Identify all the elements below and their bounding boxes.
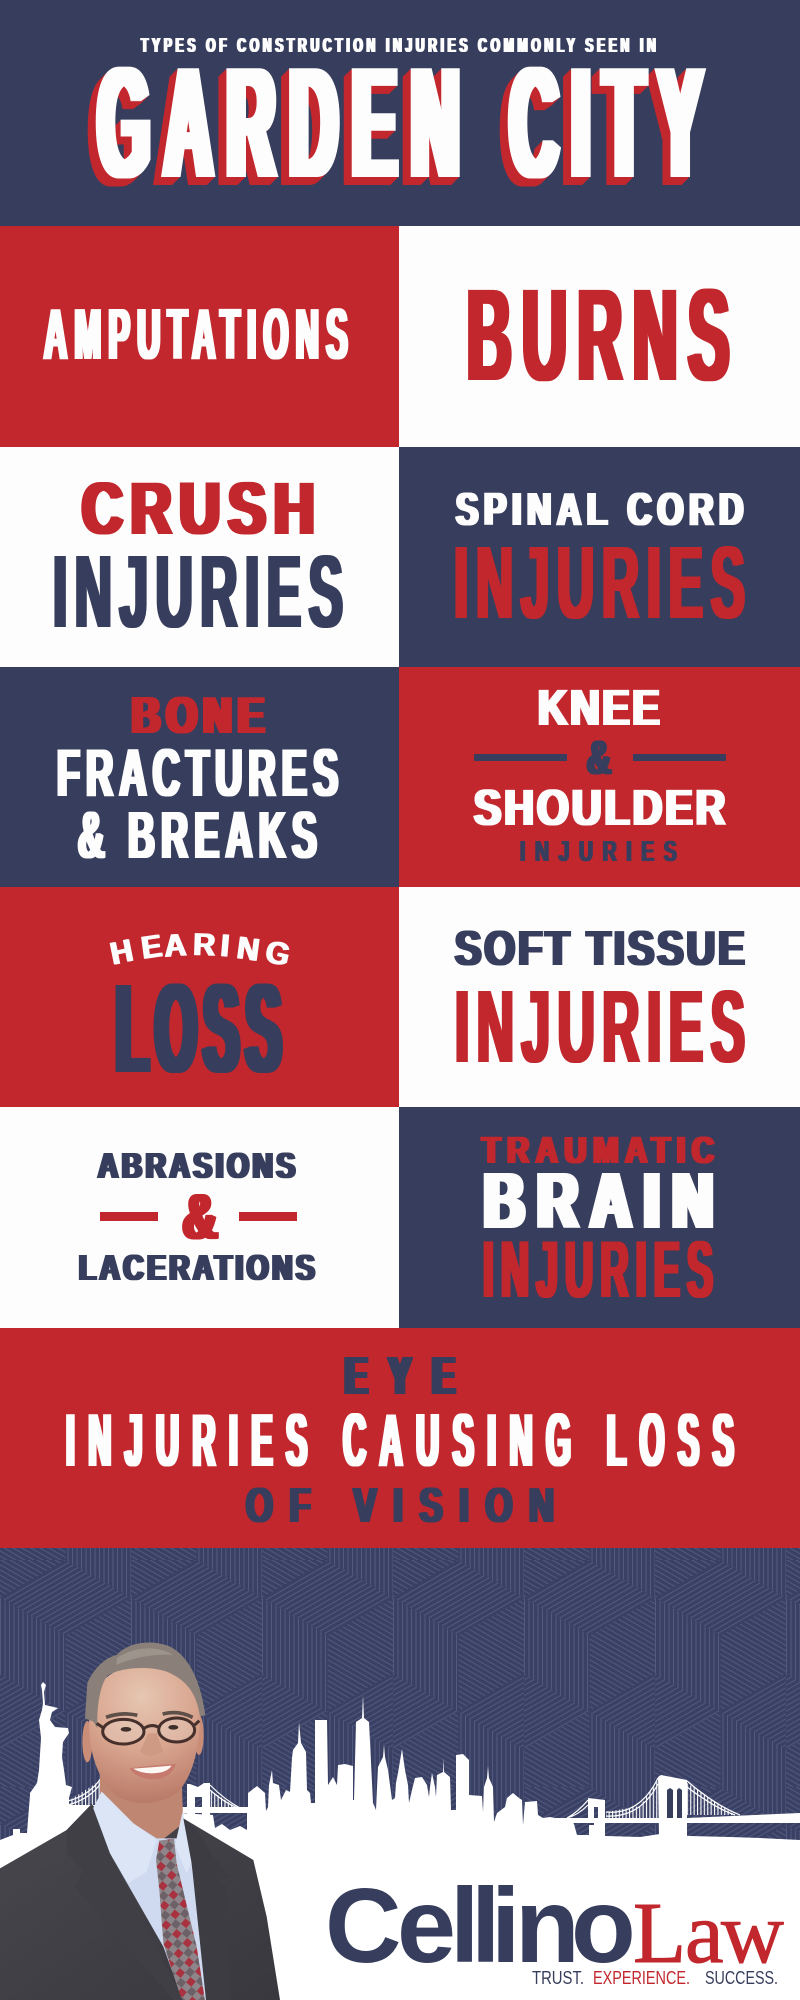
panel: eye injuries: OF VISION [246,1478,554,1534]
wordmark: Law: Law [633,1884,784,1981]
middle bridge [175,1783,248,1815]
panel: soft tissue injuries: INJURIES [455,970,745,1085]
panel: eye injuries [0,1328,800,1548]
face [89,1665,200,1803]
panel: abrasions and lacerations: LACERATIONS [79,1248,315,1288]
logo [325,1867,784,1988]
title: Garden City: CITY [510,34,702,211]
panel: bone fractures and breaks: & BREAKS [78,799,317,873]
panel: eye injuries: INJURIES CAUSING LOSS [66,1400,734,1483]
ears [82,1721,92,1762]
panel: hearing loss: LOSS [116,960,281,1099]
hair [85,1643,205,1728]
panel: crush injuries [0,447,399,667]
left bridge [68,1778,104,1813]
panel: knee and shoulder injuries [399,667,800,887]
panel: abrasions and lacerations [0,1107,399,1328]
panel: abrasions and lacerations: ABRASIONS [98,1146,295,1186]
panel: knee and shoulder injuries: & [587,730,611,784]
lapels [67,1804,183,2000]
panel: traumatic brain injuries [399,1107,800,1328]
panel: knee and shoulder injuries: SHOULDER [474,779,725,836]
eyebrows [106,1713,193,1717]
nose [140,1733,163,1756]
panel: knee and shoulder injuries: INJURIES [520,836,677,868]
panel: amputations [0,226,399,447]
panel: bone fractures and breaks: FRACTURES [57,734,338,811]
panel: crush injuries: CRUSH [82,468,315,550]
wordmark: Cellino: Cellino [325,1867,636,1985]
tie [156,1839,205,2000]
suit [0,1804,280,2000]
panel: traumatic brain injuries: INJURIES [483,1224,713,1315]
panel: spinal cord injuries: SPINAL CORD [456,483,743,535]
skyline silhouette [0,1682,800,2000]
photo: attorney portrait illustration [0,1643,280,2000]
panel: bone fractures and breaks: BONE [132,685,264,744]
shirt [91,1792,206,2000]
tagline: TRUST. [532,1967,584,1988]
panel: eye injuries: EYE [345,1345,455,1406]
panel: soft tissue injuries: SOFT TISSUE [455,922,745,976]
title: Garden City: GARDEN [98,34,459,211]
panel: hearing loss: HEARING [107,926,293,974]
panel: soft tissue injuries [399,887,800,1107]
tagline [532,1967,778,1988]
panel: crush injuries: INJURIES [53,535,343,650]
panel: bone fractures and breaks [0,667,399,887]
panel: header [0,0,800,226]
panel: burns: BURNS [467,261,729,408]
panel: spinal cord injuries: INJURIES [454,526,745,641]
panel: hearing loss [0,887,399,1107]
eyes [121,1725,178,1732]
shirt collar [91,1792,192,1883]
panel: burns [399,226,800,447]
subtitle: TYPES OF CONSTRUCTION INJURIES COMMONLY SEEN IN [141,34,656,57]
neck [100,1773,183,1843]
panel: footer background pattern [0,1548,800,2000]
hair highlight [117,1648,173,1665]
panel: amputations: AMPUTATIONS [44,293,348,375]
panel: traumatic brain injuries: BRAIN [484,1155,713,1245]
panel: abrasions and lacerations: & [183,1181,217,1254]
ground and buildings [0,1682,800,2000]
title: Garden City [98,34,702,211]
panel: traumatic brain injuries: TRAUMATIC [482,1130,714,1172]
right bridges [567,1775,800,1836]
mouth [129,1764,176,1779]
panel: spinal cord injuries [399,447,800,667]
panel: knee and shoulder injuries: KNEE [538,679,660,736]
glasses [97,1718,199,1744]
tagline: EXPERIENCE. [593,1967,690,1988]
tagline: SUCCESS. [705,1967,778,1988]
